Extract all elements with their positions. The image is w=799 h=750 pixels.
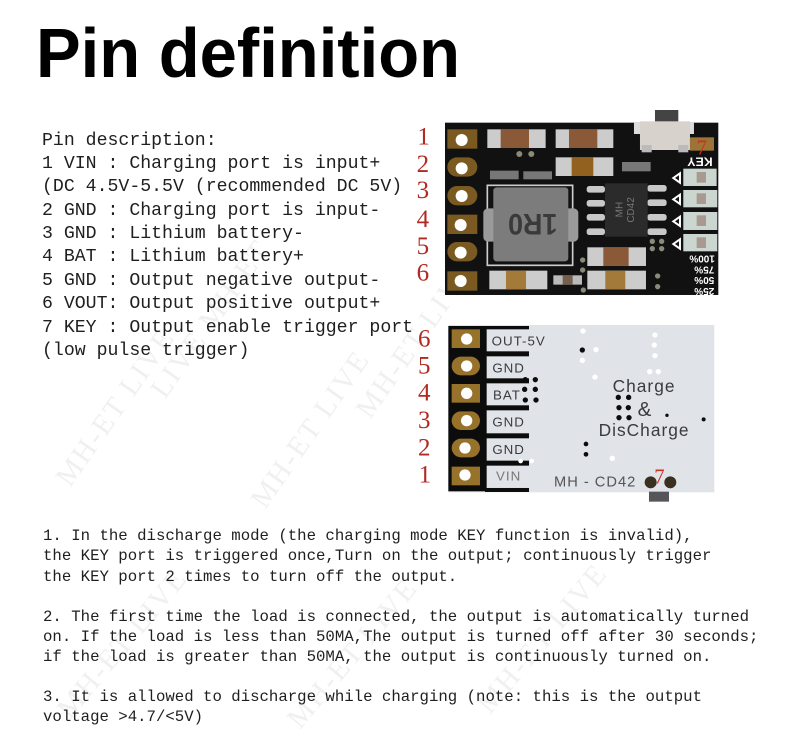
note 3: voltage >4.7/<5V) [43, 708, 203, 726]
back pin numbers: 4 [418, 379, 431, 406]
front pin numbers: 5 [417, 233, 429, 260]
LEDs and silkscreen: 50% [694, 274, 714, 285]
pin description text block: 4 BAT : Lithium battery+ [42, 247, 304, 267]
note 3: 3. It is allowed to discharge while charging (note: this is the output [43, 688, 702, 706]
pin labels: VIN [496, 469, 521, 484]
inductor [483, 185, 578, 265]
solder pads [447, 129, 477, 291]
pin description text block: 1 VIN : Charging port is input+ [42, 154, 380, 174]
LEDs and silkscreen: 25% [694, 285, 714, 296]
IC chip [587, 183, 667, 237]
back pin numbers: 7 [654, 466, 665, 488]
watermark: LIVE MH-ET [145, 234, 277, 404]
pin label strips [485, 326, 529, 492]
via dots [516, 151, 664, 293]
charge and discharge label [554, 376, 690, 491]
watermark: MH-ET LIVE [51, 563, 194, 724]
back pin numbers: 2 [418, 435, 430, 462]
pin description text block: (DC 4.5V-5.5V (recommended DC 5V) [42, 177, 402, 197]
front pin numbers [417, 123, 707, 287]
LEDs and silkscreen: KEY [687, 154, 713, 168]
charge and discharge label: MH - CD42 [554, 475, 636, 491]
pin description text block: 6 VOUT: Output positive output+ [42, 294, 380, 314]
switch and key contacts [645, 476, 676, 502]
back pin numbers [418, 326, 665, 489]
pin description text block: 3 GND : Lithium battery- [42, 224, 304, 244]
front pin numbers: 3 [417, 177, 429, 204]
note 3 [43, 688, 702, 726]
front pin numbers: 4 [417, 206, 430, 233]
LEDs and silkscreen: 75% [694, 263, 714, 274]
front PCB photo [417, 110, 718, 296]
inductor: 1R0 [508, 207, 557, 240]
watermark: MH-ET LIVE [350, 254, 482, 424]
watermark [50, 234, 614, 734]
note 1 [43, 527, 711, 586]
charge and discharge label: & [638, 398, 652, 421]
IC chip: MH [615, 202, 626, 217]
note 2 [43, 608, 758, 666]
board [448, 325, 714, 492]
watermark: MH-ET LIVE [245, 344, 377, 514]
pads [452, 329, 480, 485]
pin labels: GND [492, 361, 525, 376]
slide switch [445, 110, 718, 295]
back pin numbers: 3 [418, 407, 430, 434]
note 2: if the load is greater than 50MA, the output is continuously turned on. [43, 648, 711, 666]
pin description text block: 7 KEY : Output enable trigger port [42, 318, 413, 338]
via holes [522, 347, 706, 457]
charge and discharge label: Charge [613, 376, 675, 396]
front pin numbers: 1 [417, 123, 430, 150]
back pin numbers: 5 [418, 352, 430, 379]
pin labels: GND [492, 442, 525, 457]
pin description text block: 5 GND : Output negative output- [42, 271, 380, 291]
pin labels: GND [492, 415, 525, 430]
pin description text block: (low pulse trigger) [42, 341, 249, 361]
back pin numbers: 6 [418, 326, 430, 353]
pin description text block: Pin description: [42, 131, 217, 151]
note 1: the KEY port is triggered once,Turn on the output; continuously trigger [43, 547, 711, 565]
pin description text block [42, 131, 413, 361]
watermark: MH-ET LIVE [50, 322, 182, 492]
LEDs and silkscreen: 100% [689, 252, 715, 263]
front pin numbers: 7 [697, 137, 707, 159]
LEDs and silkscreen [673, 154, 717, 296]
pin labels: OUT-5V [492, 334, 546, 349]
note 1: 1. In the discharge mode (the charging mode KEY function is invalid), [43, 527, 693, 545]
back pin numbers: 1 [419, 462, 431, 489]
title: Pin definition [36, 14, 460, 92]
pin labels [492, 334, 546, 484]
front pin numbers: 6 [417, 260, 429, 287]
note 2: on. If the load is less than 50MA,The output is turned off after 30 seconds; [43, 628, 758, 646]
IC chip: CD42 [626, 197, 637, 223]
capacitors [487, 129, 651, 289]
note 1: the KEY port 2 times to turn off the output. [43, 568, 457, 586]
back PCB photo [418, 325, 714, 502]
note 2: 2. The first time the load is connected, the output is automatically turned [43, 608, 749, 626]
charge and discharge label: DisCharge [599, 420, 690, 440]
pin labels: BAT [493, 387, 521, 402]
watermark: MH-ET LIVE [281, 573, 424, 734]
pin description text block: 2 GND : Charging port is input- [42, 201, 380, 221]
front pin numbers: 2 [417, 151, 429, 178]
watermark: MH-ET LIVE [471, 558, 614, 719]
